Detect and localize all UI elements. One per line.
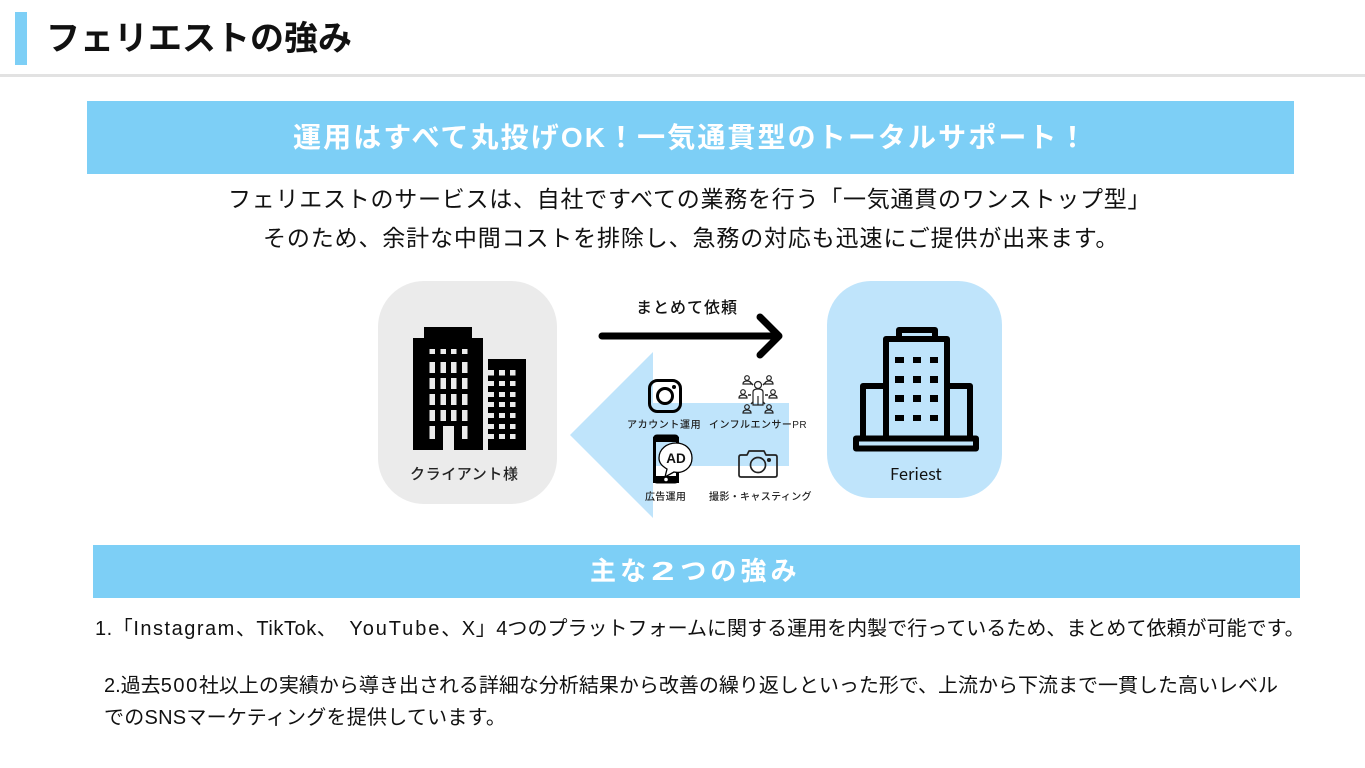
header accent bar [15,12,27,65]
label: インフルエンサーPR [709,420,807,431]
label: アカウント運用 [627,420,701,431]
banner: main strengths heading [93,545,1300,598]
banner: total support heading [87,101,1294,174]
strength 2 text [104,675,1278,729]
strength 1 text: 1.「Instagram、TikTok、 YouTube、X」4つのプラットフォームに関する運用を内製で行っているため、まとめて依頼が可能です。 [95,618,1305,640]
icon: instagram [648,379,682,413]
label: request together: まとめて依頼 [636,300,738,317]
icon: Feriest office building [853,327,979,452]
icon: smartphone with AD bubble: AD [666,451,686,466]
intro text block: そのため、余計な中間コストを排除し、急務の対応も迅速にご提供が出来ます。 [263,225,1119,251]
panel: client card [378,281,557,504]
service: photo and casting [709,450,812,503]
panel: Feriest card [827,281,1002,498]
icon: camera [738,450,778,478]
service: influencer PR [709,375,807,431]
label: 撮影・キャスティング [709,492,812,503]
label: 広告運用 [645,492,686,503]
page title: フェリエストの強み [46,20,352,58]
intro text block [228,186,1151,251]
arrow: services delivered to client [570,352,789,518]
icon: client office buildings [413,327,526,450]
strengths heading text: 主な つの強み [590,556,801,586]
icon: influencer network [738,375,778,414]
strength 2 text: 2.過去500社以上の実績から導き出される詳細な分析結果から改善の繰り返しといった形で、上流から下流まで一貫した高いレベル [104,675,1278,697]
client label: クライアント様 [410,466,519,483]
intro text block: フェリエストのサービスは、自社ですべての業務を行う「一気通貫のワンストップ型」 [228,186,1151,212]
strength 2 text: でのSNSマーケティングを提供しています。 [104,707,506,729]
service: ad management [645,434,693,503]
strengths heading text: 2 [652,556,675,586]
Feriest label: Feriest [890,461,942,485]
icon: smartphone with AD bubble [653,434,693,484]
service: account management [627,379,701,431]
arrow: request to Feriest [598,299,782,358]
banner heading text: 運用はすべて丸投げOK！一気通貫型のトータルサポート！ [293,122,1089,153]
